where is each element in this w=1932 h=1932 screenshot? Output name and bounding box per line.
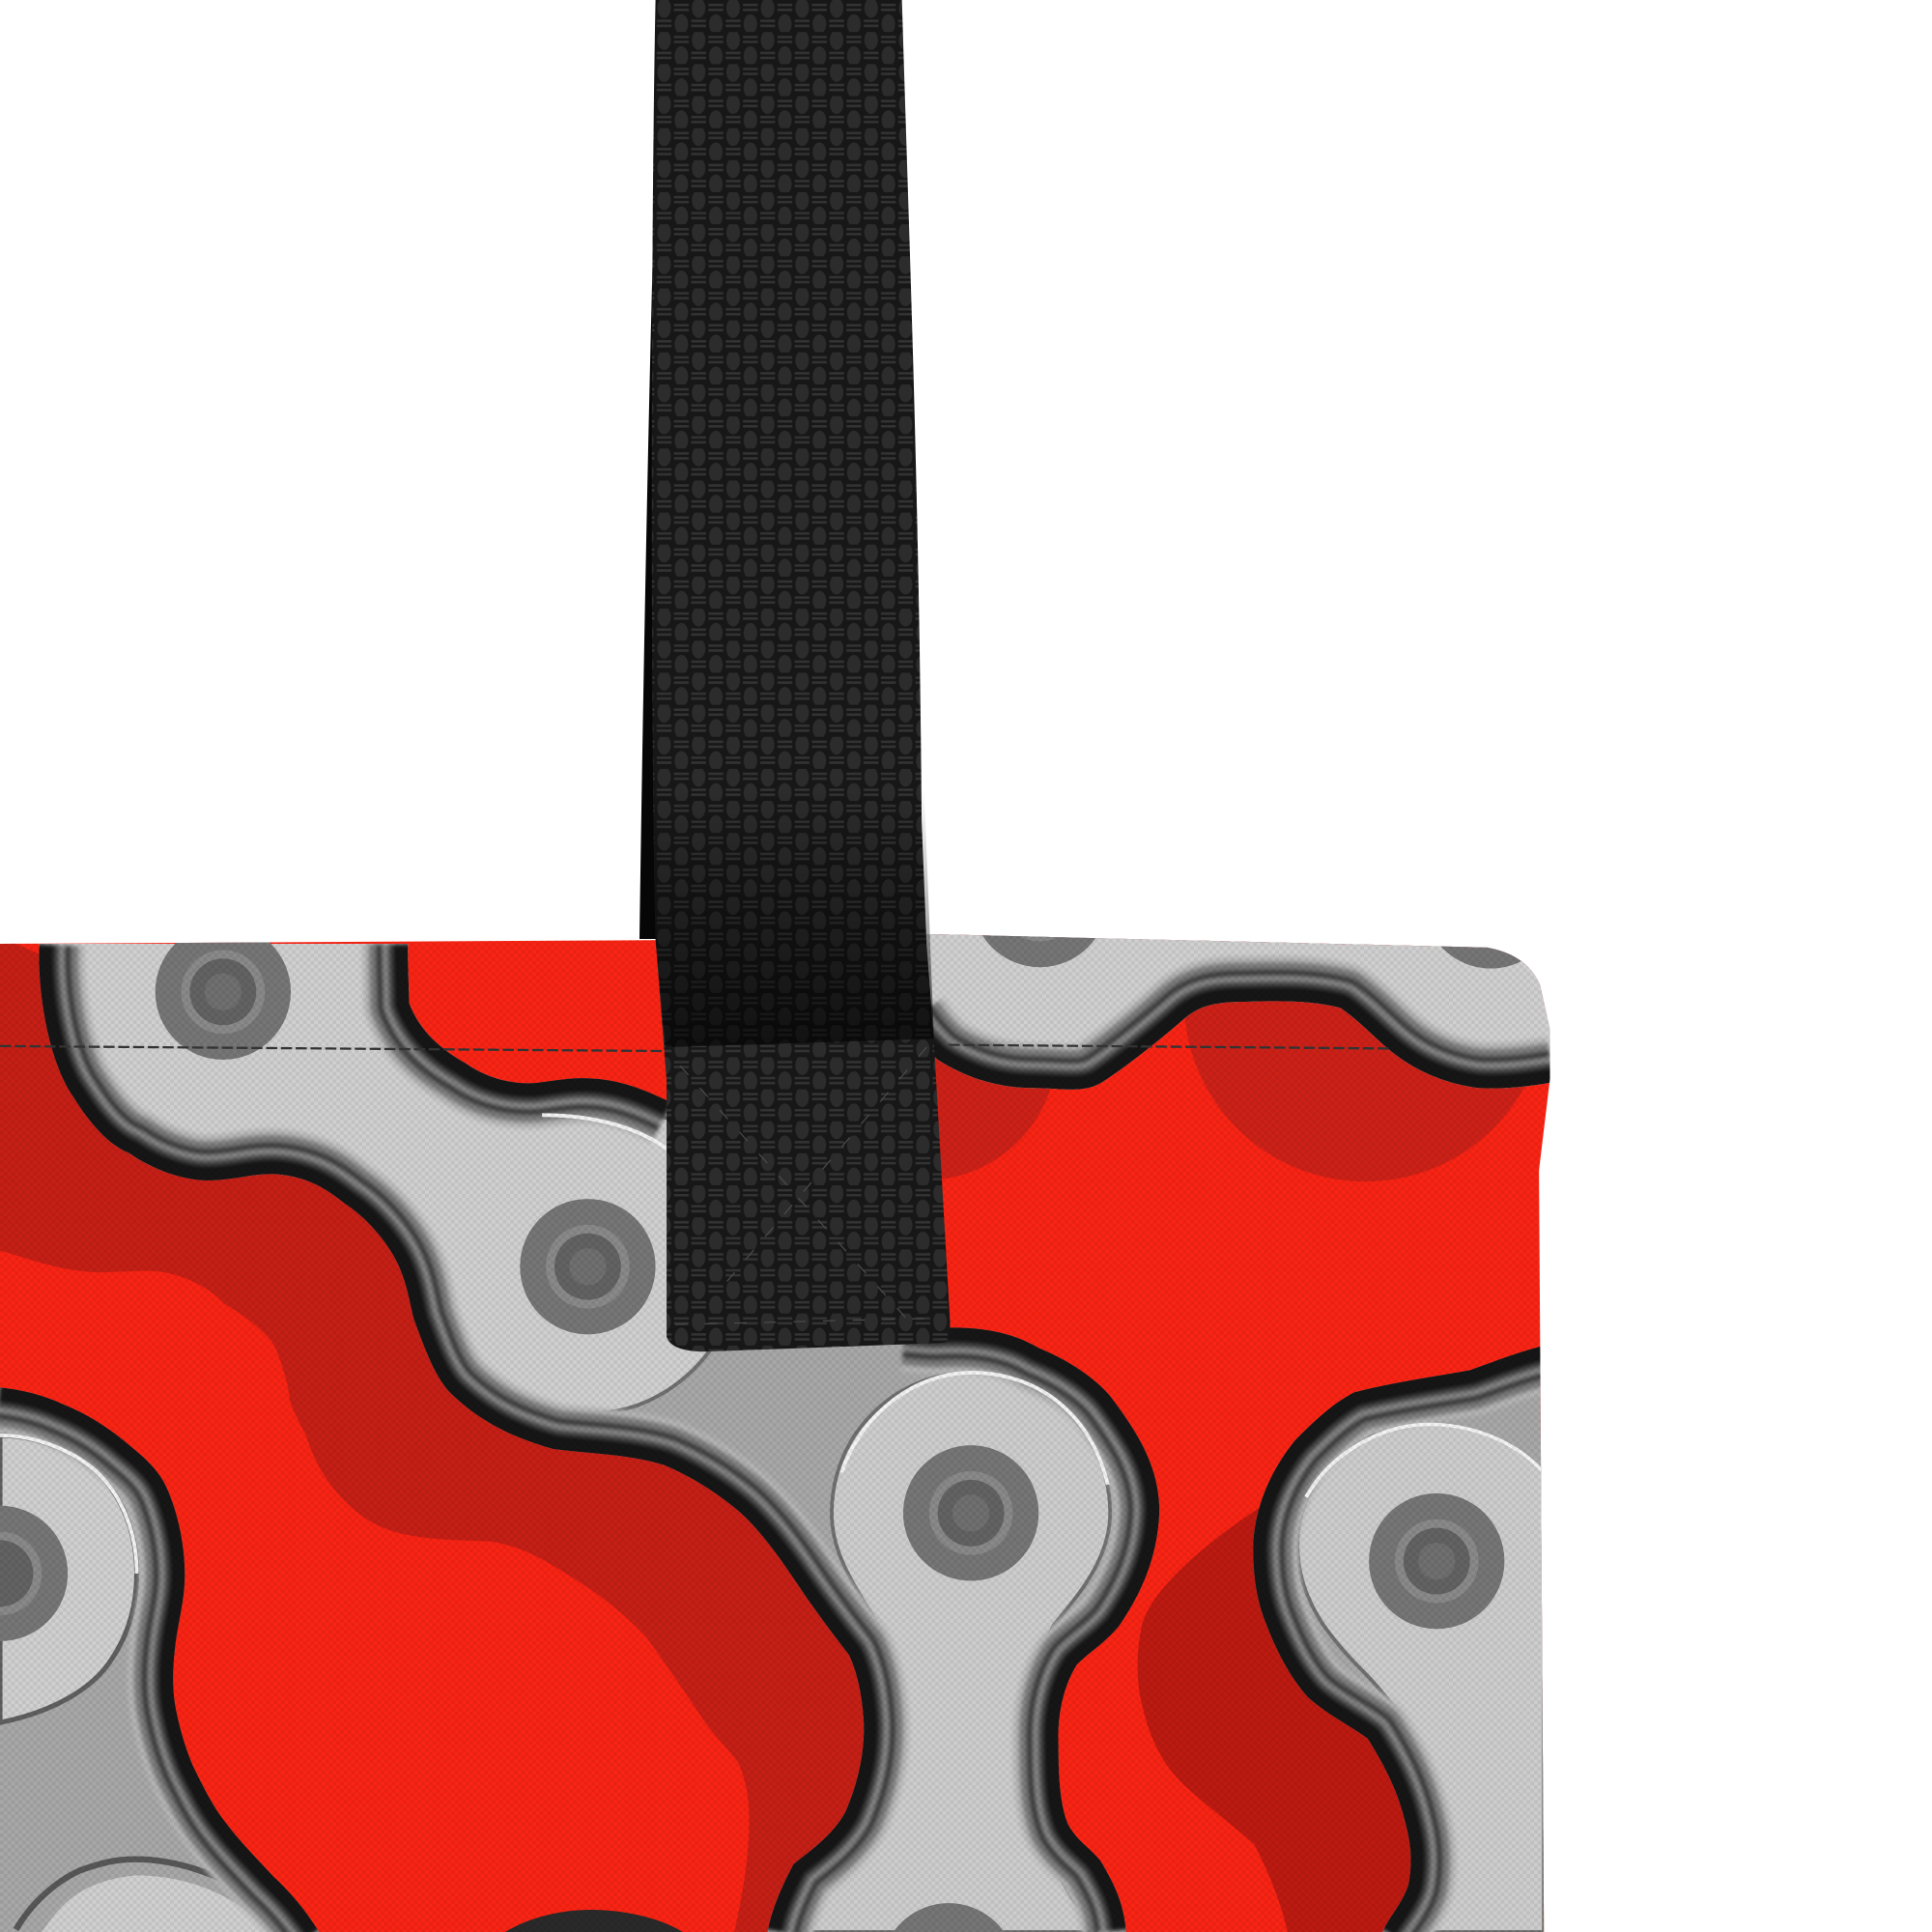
dark red blob: left [0,936,899,1932]
chain: bottom-left lower link top [42,1875,268,1932]
chain: bottom centre link top [505,1910,683,1932]
chain: base gray plates [0,930,1555,1932]
chain: upper diagonal light link [25,934,711,1413]
dark red blob: lower right [1138,1508,1410,1932]
dark red blob: top right [1184,941,1546,1182]
strap webbing [652,0,950,1351]
chain: metal links [0,930,1559,1932]
chain: left end light link [0,1435,137,1722]
chain rollers [0,832,1559,1932]
fabric texture [0,930,1555,1932]
dark red blob: top centre [935,934,1051,1179]
red fabric base [0,930,1555,1932]
chain: bottom-left lower link outline [14,1857,218,1931]
chain: top-right light link [918,930,1559,1096]
chain: metallic highlights [0,1115,1544,1574]
chain: dark outline bands [0,944,1555,1929]
strap stitching [675,1047,930,1324]
stitch line [0,1045,1392,1051]
chain: right light link [1297,1424,1544,1932]
strap back shadow [639,246,666,939]
strap [639,0,950,1351]
chain: vertical light link [797,1373,1110,1932]
bag body [0,933,1550,1932]
strap shadow above fold [653,788,934,1047]
